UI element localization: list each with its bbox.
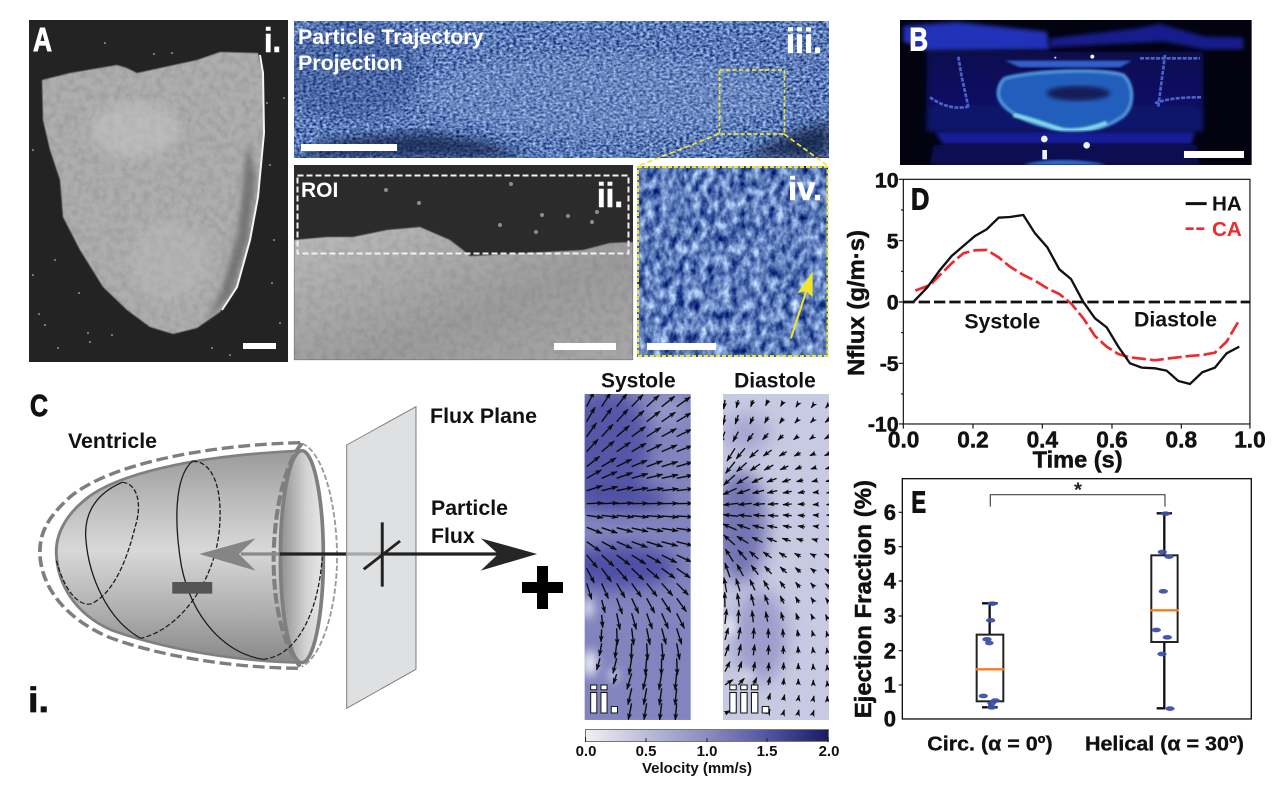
x axis ticks: 0.4	[1027, 427, 1058, 453]
label C: C	[30, 388, 48, 423]
label Systole: Systole	[964, 309, 1040, 333]
y axis ticks: 5	[884, 534, 896, 559]
label iii: iii.	[728, 680, 771, 721]
panel ii: ROI grayscale image	[294, 165, 633, 360]
label iii: iii.	[786, 22, 822, 61]
bright spots	[1041, 55, 1094, 159]
colorbar tick labels: 0.5	[636, 743, 656, 760]
label B: B	[909, 22, 928, 58]
title Systole: Systole	[601, 369, 676, 392]
colorbar title: Velocity (mm/s)	[642, 760, 752, 777]
flux arrows	[241, 549, 498, 559]
y axis ticks: 4	[884, 569, 897, 594]
particles	[384, 182, 599, 234]
specks	[32, 42, 285, 356]
panel C: ventricle schematic	[28, 388, 563, 720]
x axis ticks: 1.0	[1234, 427, 1266, 453]
plus icon	[522, 566, 563, 609]
y axis ticks: 0	[884, 707, 896, 732]
label Flux Plane: Flux Plane	[430, 404, 537, 428]
y axis ticks: 1	[884, 673, 896, 698]
yellow dashed border	[638, 167, 828, 356]
label iv: iv.	[788, 170, 822, 207]
colorbar tick labels: 0.0	[576, 743, 596, 760]
cross mark	[364, 522, 400, 587]
quiver arrows	[587, 392, 693, 720]
flux plane	[347, 407, 416, 708]
legend	[1186, 193, 1242, 241]
sample holder	[1005, 61, 1132, 67]
yellow zoom box	[720, 70, 784, 134]
yellow arrow	[791, 272, 813, 338]
label Ventricle: Ventricle	[68, 429, 157, 453]
supports	[930, 55, 1202, 108]
scale bar	[301, 144, 397, 151]
panel D: Nflux line chart	[843, 168, 1266, 473]
x axis labels: Helical (α = 30º)	[1085, 733, 1244, 756]
tissue edge	[294, 227, 633, 360]
x axis ticks: 0.0	[888, 427, 919, 453]
label ii: ii.	[589, 680, 619, 721]
label E: E	[911, 486, 926, 520]
label Particle Flux: Particle	[431, 496, 508, 520]
legend: CA	[1212, 218, 1242, 241]
CA curve	[915, 250, 1239, 360]
outer dashed contour	[40, 443, 302, 668]
y axis ticks: 3	[884, 604, 896, 629]
scale bar	[243, 343, 276, 349]
y axis ticks	[884, 500, 897, 732]
box: helical	[1150, 511, 1179, 711]
x axis labels	[927, 733, 1244, 756]
significance bracket: *	[1074, 479, 1083, 502]
colorbar tick labels: 2.0	[819, 743, 839, 760]
label Particle Flux: Flux	[431, 524, 475, 548]
title Diastole: Diastole	[734, 369, 816, 392]
significance bracket	[990, 479, 1165, 507]
x axis title: Time (s)	[1033, 447, 1123, 473]
y axis ticks: -5	[880, 352, 899, 376]
y axis ticks: -10	[868, 413, 899, 437]
label Diastole: Diastole	[1134, 308, 1217, 332]
panel iv: magnified trajectory	[637, 134, 828, 357]
top plate	[903, 22, 1050, 51]
panel C ii: systole flow field	[584, 372, 691, 720]
label i: i.	[28, 681, 49, 720]
x axis labels: Circ. (α = 0º)	[927, 733, 1053, 756]
ventricle drawing	[40, 407, 537, 708]
panel B: bioreactor photo	[900, 20, 1252, 165]
panel C iii: diastole flow field	[723, 372, 829, 720]
tank	[927, 52, 1203, 132]
helical fibers	[56, 461, 322, 659]
x axis ticks	[888, 427, 1266, 453]
legend: HA	[1212, 193, 1242, 216]
tank base	[935, 132, 1195, 145]
colorbar: velocity	[576, 730, 839, 777]
scale bar	[1184, 151, 1244, 158]
label D: D	[911, 182, 929, 216]
label ii: ii.	[597, 177, 623, 215]
x axis ticks: 0.2	[957, 427, 989, 453]
label ROI: ROI	[301, 179, 338, 202]
y axis title: Ejection Fraction (%)	[850, 480, 876, 718]
quiver arrows	[720, 400, 831, 713]
x axis ticks: 0.6	[1096, 427, 1128, 453]
colorbar tick labels: 1.5	[757, 743, 777, 760]
title: Particle Trajectory Projection: Projection	[298, 51, 403, 75]
panel A: tissue photograph	[29, 20, 288, 362]
box: circumferential	[975, 601, 1004, 710]
scale bar	[647, 343, 716, 350]
x axis ticks: 0.8	[1166, 427, 1197, 453]
y axis ticks: 5	[887, 229, 899, 253]
label A: A	[33, 21, 52, 58]
zero line	[903, 298, 1250, 306]
panel iii: particle trajectory projection	[280, 20, 829, 158]
scale bar	[554, 343, 616, 350]
panel E: ejection fraction box plot	[850, 479, 1251, 756]
tissue sample	[42, 52, 264, 334]
y axis title: Nflux (g/m·s)	[843, 230, 869, 376]
y axis ticks: 10	[875, 168, 899, 192]
ROI dashed box	[298, 176, 628, 254]
y axis ticks: 0	[887, 291, 899, 315]
y axis ticks: 2	[884, 638, 896, 663]
y axis ticks: 6	[884, 500, 896, 525]
label i: i.	[264, 22, 281, 60]
title: Particle Trajectory Projection: Particle Trajectory	[298, 25, 484, 49]
colorbar tick labels	[576, 743, 839, 760]
center dash	[172, 582, 212, 594]
HA curve	[913, 215, 1239, 384]
colorbar tick labels: 1.0	[697, 743, 717, 760]
y axis ticks	[868, 168, 899, 437]
ventricle glow	[998, 71, 1132, 131]
zoom connector lines	[638, 134, 828, 166]
opening	[280, 451, 323, 663]
